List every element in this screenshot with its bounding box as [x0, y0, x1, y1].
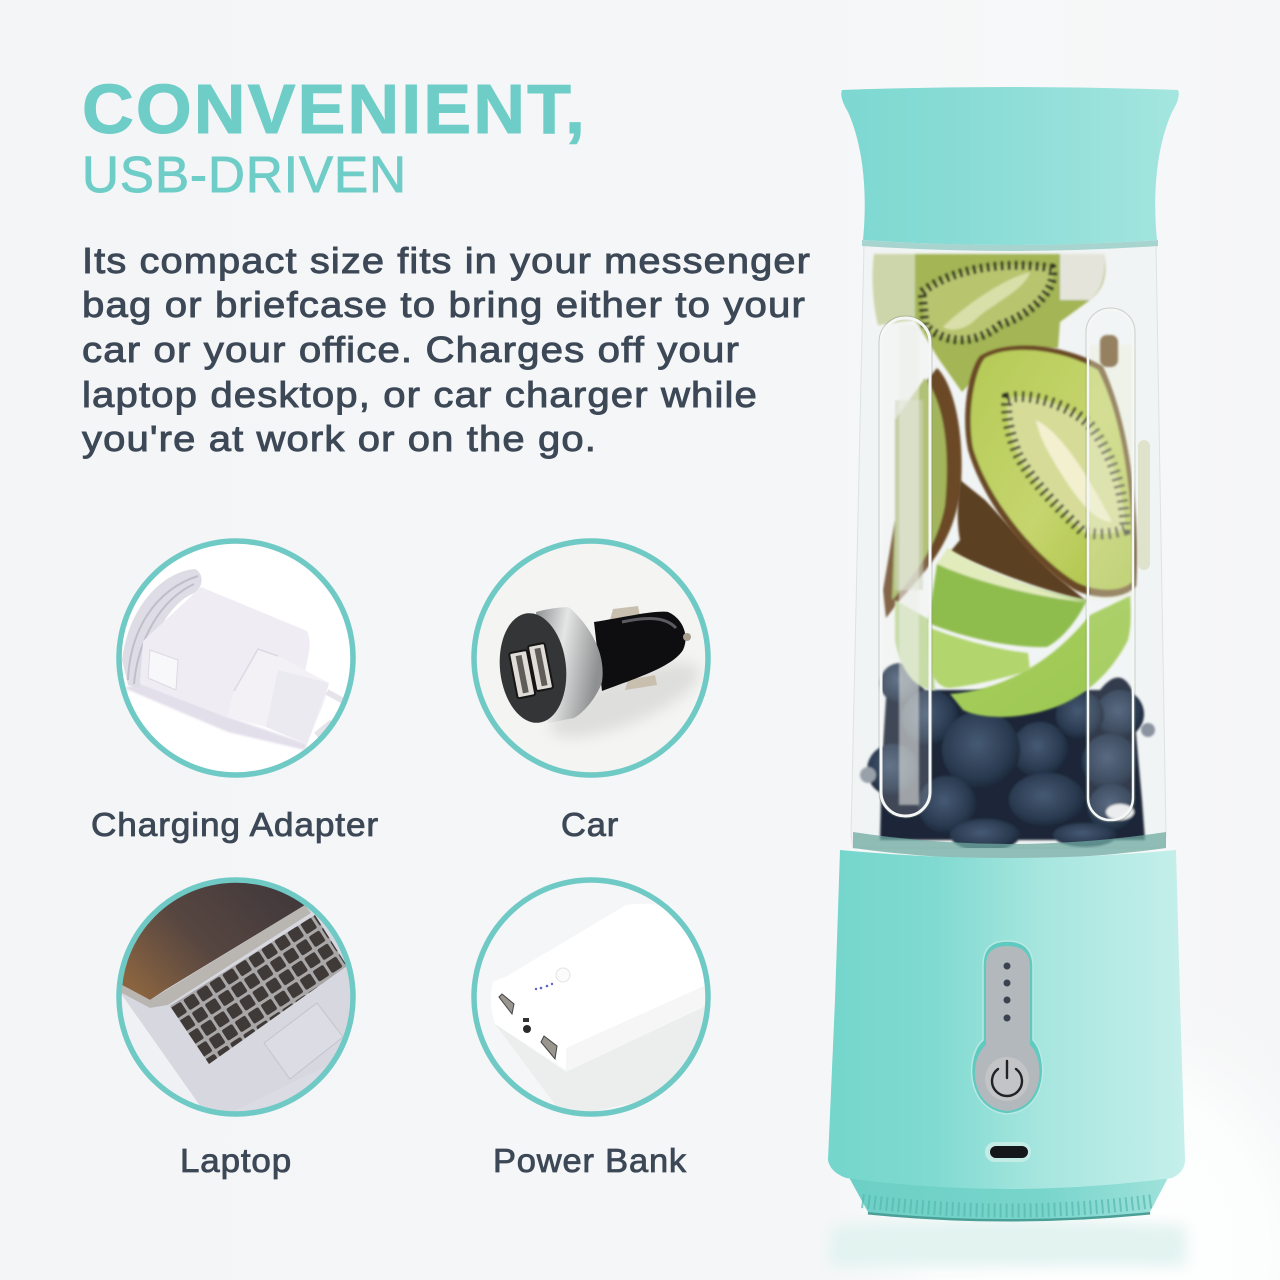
label: power bank: Power Bank	[493, 1142, 687, 1179]
title	[82, 70, 587, 203]
apple slices	[895, 548, 1131, 717]
top kiwi slice	[873, 254, 1105, 392]
blender base	[828, 850, 1185, 1219]
label: laptop: Laptop	[180, 1142, 292, 1179]
icon: charging adapter	[119, 541, 353, 775]
body text: laptop desktop, or car charger while	[82, 374, 758, 415]
blender reflection	[828, 1219, 1186, 1266]
kiwi skin behind	[950, 480, 1085, 600]
label: charging adapter: Charging Adapter	[91, 806, 379, 843]
control panel	[972, 941, 1043, 1114]
icon: car charger	[474, 541, 708, 775]
body text: you're at work or on the go.	[82, 418, 597, 459]
glass ribs	[879, 308, 1135, 822]
glass rim	[862, 240, 1158, 251]
title: USB-DRIVEN	[82, 146, 407, 203]
icon: power bank	[474, 880, 712, 1118]
USB-C port	[985, 1142, 1031, 1162]
right edge fruit hints	[1138, 440, 1150, 570]
large kiwi slice	[965, 345, 1137, 600]
blueberries	[860, 663, 1155, 851]
blender lid	[841, 87, 1179, 245]
left kiwi slice	[883, 368, 962, 618]
icon: laptop	[110, 870, 360, 1120]
body text: bag or briefcase to bring either to your	[82, 284, 806, 325]
body text: Its compact size fits in your messenger	[82, 240, 811, 281]
blender jar with fruit	[851, 240, 1166, 859]
title: CONVENIENT,	[82, 70, 587, 148]
blender	[828, 87, 1185, 1219]
icon: power button	[985, 1057, 1029, 1101]
label: car: Car	[561, 806, 619, 843]
body text	[82, 240, 811, 459]
body text: car or your office. Charges off your	[82, 329, 740, 370]
